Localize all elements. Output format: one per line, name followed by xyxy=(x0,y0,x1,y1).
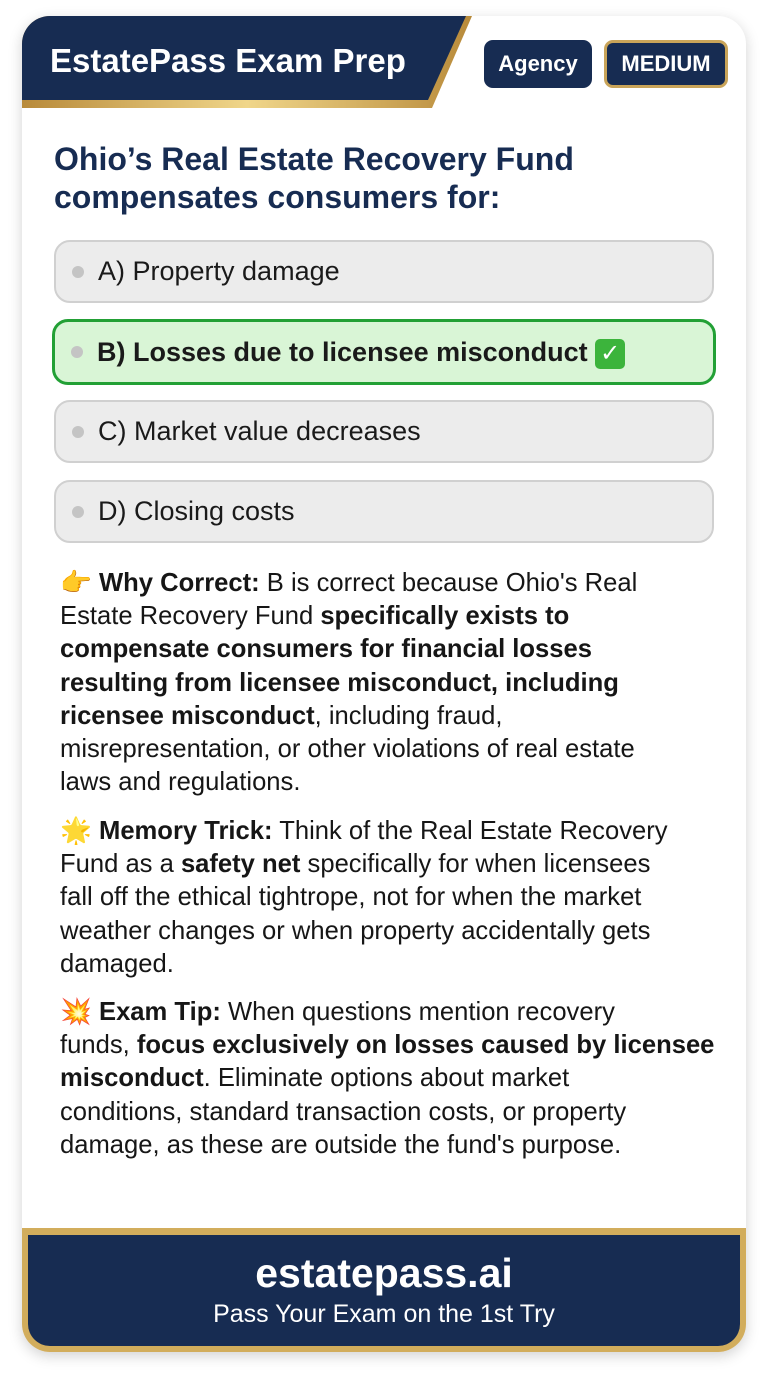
badge: MEDIUM xyxy=(604,40,728,88)
option C xyxy=(54,400,714,463)
why correct xyxy=(60,569,637,796)
option B correct xyxy=(52,319,716,385)
header banner: EstatePass Exam Prep xyxy=(50,42,406,79)
memory trick: 🌟 Memory Trick: Think of the Real Estate Recovery xyxy=(60,817,668,845)
why correct: Estate Recovery Fund specifically exists to xyxy=(60,602,569,630)
badge: Agency: Agency xyxy=(498,51,578,76)
why correct: resulting from licensee misconduct, including xyxy=(60,669,619,697)
footer tagline: Pass Your Exam on the 1st Try xyxy=(213,1300,555,1328)
option B correct: B) Losses due to licensee misconduct xyxy=(97,337,588,367)
option A: A) Property damage xyxy=(98,256,340,286)
memory trick xyxy=(60,816,668,978)
badge: Agency xyxy=(484,40,592,88)
question: Ohio’s Real Estate Recovery Fund xyxy=(54,141,574,177)
memory trick: damaged. xyxy=(60,950,174,978)
badge: MEDIUM: MEDIUM xyxy=(621,51,711,76)
question xyxy=(54,141,574,215)
footer xyxy=(22,1228,746,1352)
option A xyxy=(54,240,714,303)
exam tip: damage, as these are outside the fund's purpose. xyxy=(60,1131,621,1159)
exam tip: 💥 Exam Tip: When questions mention recovery xyxy=(60,998,615,1026)
why correct: 👉 Why Correct: B is correct because Ohio's Real xyxy=(60,569,637,597)
question: compensates consumers for: xyxy=(54,179,500,215)
footer site name: estatepass.ai xyxy=(255,1250,513,1296)
exam tip: funds, focus exclusively on losses caused by licensee xyxy=(60,1031,714,1059)
exam tip: conditions, standard transaction costs, or property xyxy=(60,1098,626,1126)
memory trick: Fund as a safety net specifically for when licensees xyxy=(60,850,650,878)
why correct: compensate consumers for financial losses xyxy=(60,635,592,663)
header banner xyxy=(22,16,472,108)
option C: C) Market value decreases xyxy=(98,416,421,446)
option D xyxy=(54,480,714,543)
why correct: misrepresentation, or other violations of real estate xyxy=(60,735,635,763)
option B correct: ✓ xyxy=(600,340,620,367)
exam tip: misconduct. Eliminate options about market xyxy=(60,1064,569,1092)
why correct: ricensee misconduct, including fraud, xyxy=(60,702,502,730)
memory trick: weather changes or when property accidentally gets xyxy=(60,917,650,945)
exam tip xyxy=(60,997,714,1159)
option D: D) Closing costs xyxy=(98,496,295,526)
memory trick: fall off the ethical tightrope, not for when the market xyxy=(60,883,641,911)
why correct: laws and regulations. xyxy=(60,768,300,796)
